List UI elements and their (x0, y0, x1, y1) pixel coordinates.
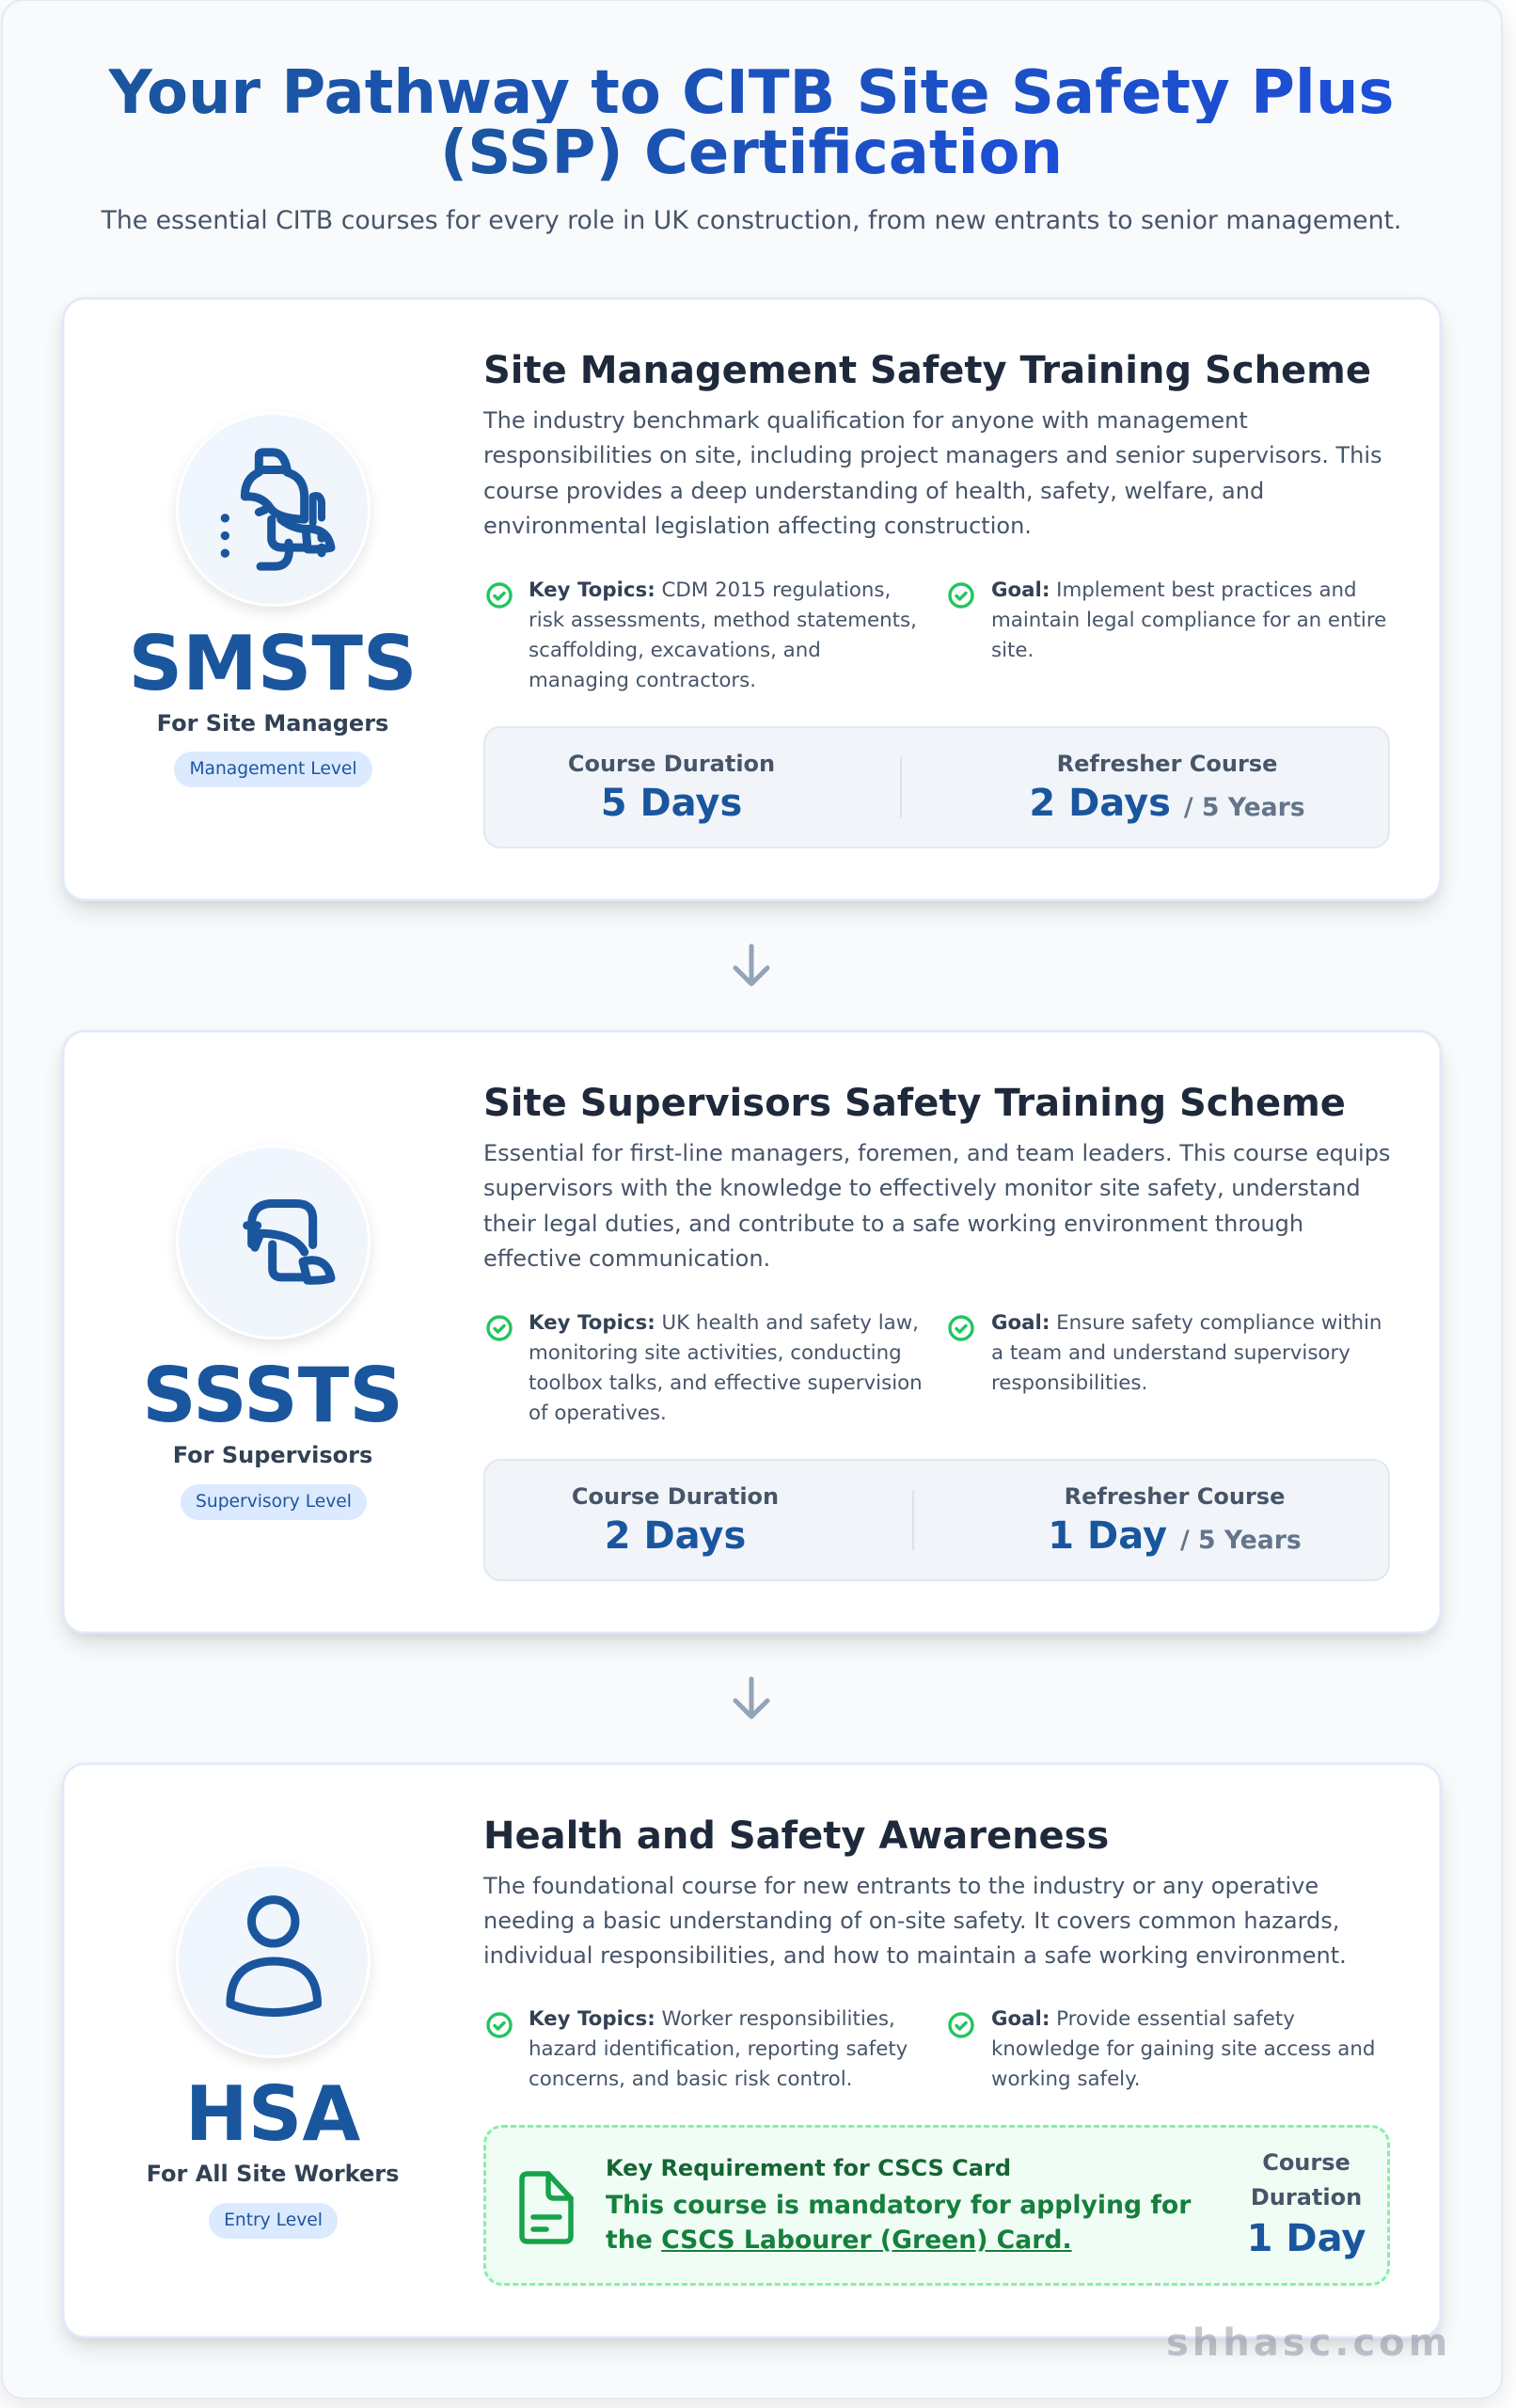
key topics: risk assessments, method statements, (529, 609, 917, 632)
check icon: goal (948, 2012, 974, 2038)
description: effective communication. (483, 1245, 770, 1272)
icon glyph: supervisor (243, 1199, 335, 1285)
divider (912, 1490, 914, 1550)
arrow (734, 1676, 769, 1719)
goal: knowledge for gaining site access and (991, 2037, 1375, 2061)
level badge: Supervisory Level (196, 1492, 352, 1512)
description (483, 407, 1382, 539)
description: The foundational course for new entrants to the industry or any operative (483, 1872, 1319, 1898)
key topics (529, 1311, 923, 1425)
check icon: key topics (486, 1315, 513, 1341)
watermark: shhasc.com (1166, 2321, 1451, 2365)
refresher label: Refresher Course (1065, 1482, 1285, 1509)
audience: For Site Managers (157, 710, 388, 737)
check icon: key topics (486, 582, 513, 609)
requirement text: the CSCS Labourer (Green) Card. (606, 2226, 1072, 2255)
key topics: concerns, and basic risk control. (529, 2067, 852, 2091)
goal: working safely. (991, 2067, 1140, 2091)
icon glyph: site manager (220, 448, 335, 571)
description (483, 1140, 1390, 1272)
title: (SSP) Certification (440, 119, 1063, 188)
icon: site manager (175, 412, 371, 607)
audience: For Supervisors (173, 1442, 372, 1468)
course heading: Site Supervisors Safety Training Scheme (483, 1082, 1346, 1125)
key topics: of operatives. (529, 1402, 667, 1425)
level badge (209, 2203, 338, 2239)
course heading: Health and Safety Awareness (483, 1814, 1109, 1857)
description: Essential for first-line managers, foremen, and team leaders. This course equips (483, 1140, 1390, 1166)
duration box (483, 1459, 1390, 1581)
refresher value: 1 Day / 5 Years (1048, 1514, 1302, 1558)
requirement text (606, 2190, 1191, 2255)
course duration value: 1 Day (1247, 2217, 1366, 2260)
goal: a team and understand supervisory (991, 1341, 1350, 1365)
key topics: scaffolding, excavations, and (529, 639, 821, 662)
title (109, 58, 1394, 188)
audience: For All Site Workers (147, 2161, 399, 2187)
description: The industry benchmark qualification for anyone with management (483, 407, 1248, 434)
course heading: Site Management Safety Training Scheme (483, 349, 1371, 392)
goal: responsibilities. (991, 1371, 1147, 1395)
course code: HSA (185, 2070, 360, 2158)
description: needing a basic understanding of on-site safety. It covers common hazards, (483, 1908, 1339, 1934)
level badge (174, 752, 372, 787)
description: individual responsibilities, and how to maintain a safe working environment. (483, 1942, 1347, 1969)
goal: maintain legal compliance for an entire (991, 609, 1386, 632)
course duration value: 5 Days (601, 782, 742, 825)
description: their legal duties, and contribute to a safe working environment through (483, 1211, 1303, 1237)
duration box (483, 726, 1390, 848)
panel: HSA (62, 1763, 1442, 2338)
course duration label: Course (1262, 2149, 1350, 2176)
goal: Goal: Implement best practices and (991, 578, 1357, 602)
course code: SSSTS (142, 1352, 403, 1439)
icon: supervisor (175, 1144, 371, 1339)
panel: SMSTS (62, 297, 1442, 901)
level badge (181, 1484, 367, 1520)
key topics: Key Topics: CDM 2015 regulations, (529, 578, 891, 602)
refresher value: 2 Days / 5 Years (1029, 782, 1305, 825)
header (102, 58, 1401, 235)
key topics (529, 2007, 908, 2091)
description: supervisors with the knowledge to effectively monitor site safety, understand (483, 1175, 1361, 1201)
check icon: goal (948, 1315, 974, 1341)
refresher label: Refresher Course (1057, 751, 1277, 777)
description (483, 1872, 1347, 1969)
icon: worker (175, 1862, 371, 2058)
arrow (734, 944, 769, 986)
course duration label (1251, 2149, 1362, 2210)
check icon: goal (948, 582, 974, 609)
course code: SMSTS (128, 620, 418, 707)
key topics: toolbox talks, and effective supervision (529, 1371, 923, 1395)
course duration label: Duration (1251, 2184, 1362, 2210)
level badge: Entry Level (224, 2210, 323, 2230)
panel: SSSTS (62, 1030, 1442, 1634)
divider (900, 757, 902, 817)
icon glyph: worker (226, 1895, 322, 2017)
goal (991, 1311, 1382, 1395)
key topics (529, 578, 917, 692)
level badge: Management Level (189, 759, 357, 779)
key topics: Key Topics: UK health and safety law, (529, 1311, 919, 1334)
description: responsibilities on site, including project managers and senior supervisors. This (483, 442, 1382, 468)
description: course provides a deep understanding of health, safety, welfare, and (483, 478, 1264, 504)
check icon: key topics (486, 2012, 513, 2038)
subtitle: The essential CITB courses for every role in UK construction, from new entrants to senior management. (102, 206, 1401, 235)
goal (991, 2007, 1375, 2091)
CSCS requirement callout (483, 2125, 1390, 2286)
description: environmental legislation affecting construction. (483, 513, 1032, 539)
course duration label: Course Duration (568, 751, 775, 777)
goal: Goal: Ensure safety compliance within (991, 1311, 1382, 1334)
key topics: Key Topics: Worker responsibilities, (529, 2007, 895, 2031)
goal: Goal: Provide essential safety (991, 2007, 1295, 2031)
requirement text: This course is mandatory for applying for (606, 2190, 1191, 2220)
key topics: monitoring site activities, conducting (529, 1341, 902, 1365)
course duration label: Course Duration (572, 1482, 779, 1509)
key topics: managing contractors. (529, 669, 756, 692)
goal: site. (991, 639, 1034, 662)
course duration value: 2 Days (605, 1514, 746, 1558)
icon: document (519, 2171, 574, 2244)
goal (991, 578, 1386, 662)
key topics: hazard identification, reporting safety (529, 2037, 908, 2061)
requirement heading: Key Requirement for CSCS Card (606, 2155, 1011, 2181)
title: Your Pathway to CITB Site Safety Plus (109, 58, 1394, 128)
